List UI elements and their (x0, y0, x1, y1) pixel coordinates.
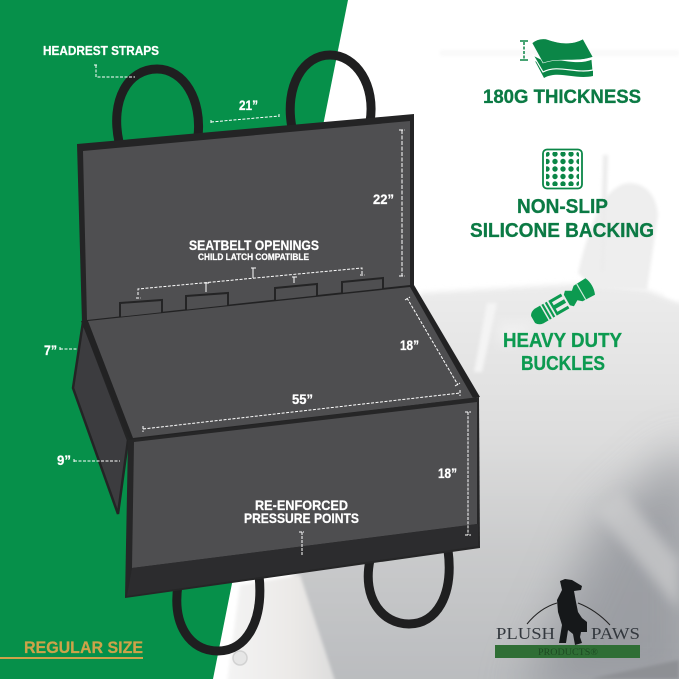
dimension labels: 55” (292, 391, 313, 407)
dimension labels: 22” (373, 191, 394, 207)
logo: Plush Paws Products: PLUSH (496, 624, 555, 643)
pressure points leader (299, 532, 304, 556)
heading: non-slip silicone backing: NON-SLIP (517, 196, 608, 218)
55 inch dimension (143, 390, 460, 432)
bottom strap right (368, 550, 449, 624)
headrest straps leader (94, 65, 135, 77)
heading: non-slip silicone backing (470, 196, 654, 242)
dimension labels: 7” (44, 342, 57, 358)
logo: Plush Paws Products: PRODUCTS® (538, 647, 598, 657)
text: seatbelt openings: CHILD LATCH COMPATIBLE (198, 252, 309, 263)
dimension labels: 18” (438, 465, 457, 481)
text: seatbelt openings (189, 237, 319, 263)
heading: heavy duty buckles: HEAVY DUTY (503, 330, 623, 352)
green background panel (0, 0, 348, 679)
logo: Plush Paws Products: PAWS (591, 624, 640, 643)
side flap (73, 322, 128, 514)
dimension labels (44, 97, 457, 481)
text: re-enforced pressure points: PRESSURE POINTS (244, 510, 359, 526)
heading: headrest straps: HEADREST STRAPS (43, 43, 159, 58)
seat panel (81, 285, 480, 442)
text: seatbelt openings: SEATBELT OPENINGS (189, 237, 319, 253)
18 inch diagonal dimension (405, 297, 460, 386)
heading: non-slip silicone backing: SILICONE BACKING (470, 220, 654, 242)
back panel of seat cover (77, 114, 414, 323)
background: car seat photo (200, 0, 679, 679)
heading: heavy duty buckles (503, 330, 623, 375)
heading: heavy duty buckles: BUCKLES (521, 353, 605, 375)
seatbelt bracket (136, 268, 365, 298)
front panel with reinforced strip (125, 397, 480, 598)
18 inch vertical dimension (465, 412, 471, 535)
dimension labels: 9” (57, 452, 71, 468)
bottom strap left (177, 575, 260, 651)
dimension lines (60, 65, 471, 556)
seatbelt opening slots (120, 278, 383, 318)
icon: fabric layers thickness (520, 39, 593, 78)
22 inch dimension (399, 130, 405, 276)
logo: Plush Paws Products (495, 579, 640, 658)
regular size label: REGULAR SIZE (24, 638, 143, 657)
icon: buckle (528, 277, 597, 328)
9 inch dimension (74, 459, 120, 463)
text: re-enforced pressure points: RE-ENFORCED (255, 497, 348, 513)
dimension labels: 18” (400, 337, 419, 353)
icon: non-slip silicone grid (543, 150, 582, 188)
headrest strap right (290, 55, 371, 128)
heading: 180G thickness: 180G THICKNESS (483, 87, 641, 108)
7 inch dimension (60, 347, 77, 351)
21 inch dimension (211, 114, 279, 124)
text: re-enforced pressure points (244, 497, 359, 526)
headrest strap left (117, 69, 199, 142)
dimension labels: 21” (239, 97, 258, 113)
